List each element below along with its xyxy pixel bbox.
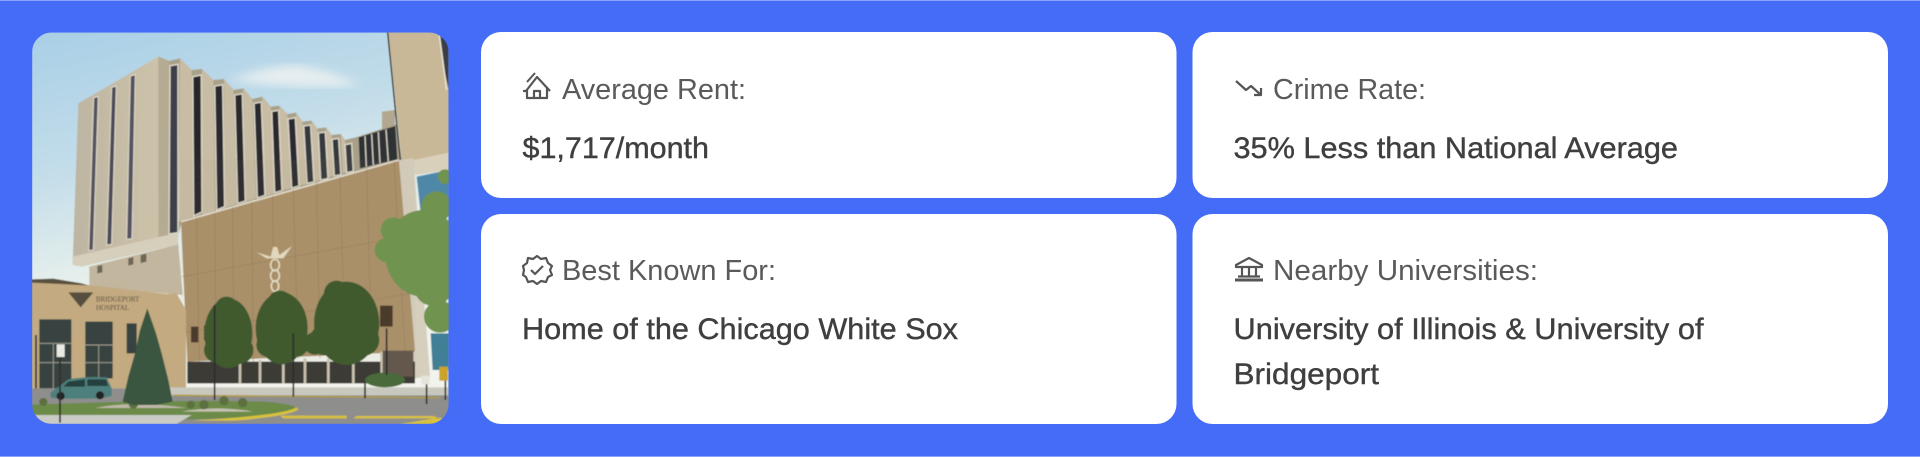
panel: crime rate <box>1192 32 1888 198</box>
photo: Bridgeport hospital building: HOSPITAL <box>96 304 129 312</box>
value: nearby universities: Bridgeport <box>1234 358 1380 391</box>
value: nearby universities: University of Illinois & University of <box>1234 313 1704 346</box>
panel: nearby universities <box>1192 214 1888 424</box>
value: best known for: Home of the Chicago White Sox <box>522 313 958 346</box>
panel: average rent <box>481 32 1176 198</box>
label: nearby universities: Nearby Universities: <box>1273 255 1538 287</box>
value: average rent: $1,717/month <box>522 132 709 165</box>
icon: trending down <box>1236 81 1261 95</box>
label: crime rate: Crime Rate: <box>1273 74 1426 106</box>
photo: Bridgeport hospital building <box>32 32 462 424</box>
icon: badge check <box>523 256 552 284</box>
label: average rent: Average Rent: <box>562 74 746 106</box>
panel: best known for <box>481 214 1176 424</box>
value: crime rate: 35% Less than National Average <box>1234 132 1678 165</box>
icon: house <box>523 73 550 98</box>
label: best known for: Best Known For: <box>562 255 776 287</box>
icon: university building <box>1235 258 1263 280</box>
photo: Bridgeport hospital building: BRIDGEPORT <box>96 296 140 304</box>
value: nearby universities <box>1234 313 1704 391</box>
